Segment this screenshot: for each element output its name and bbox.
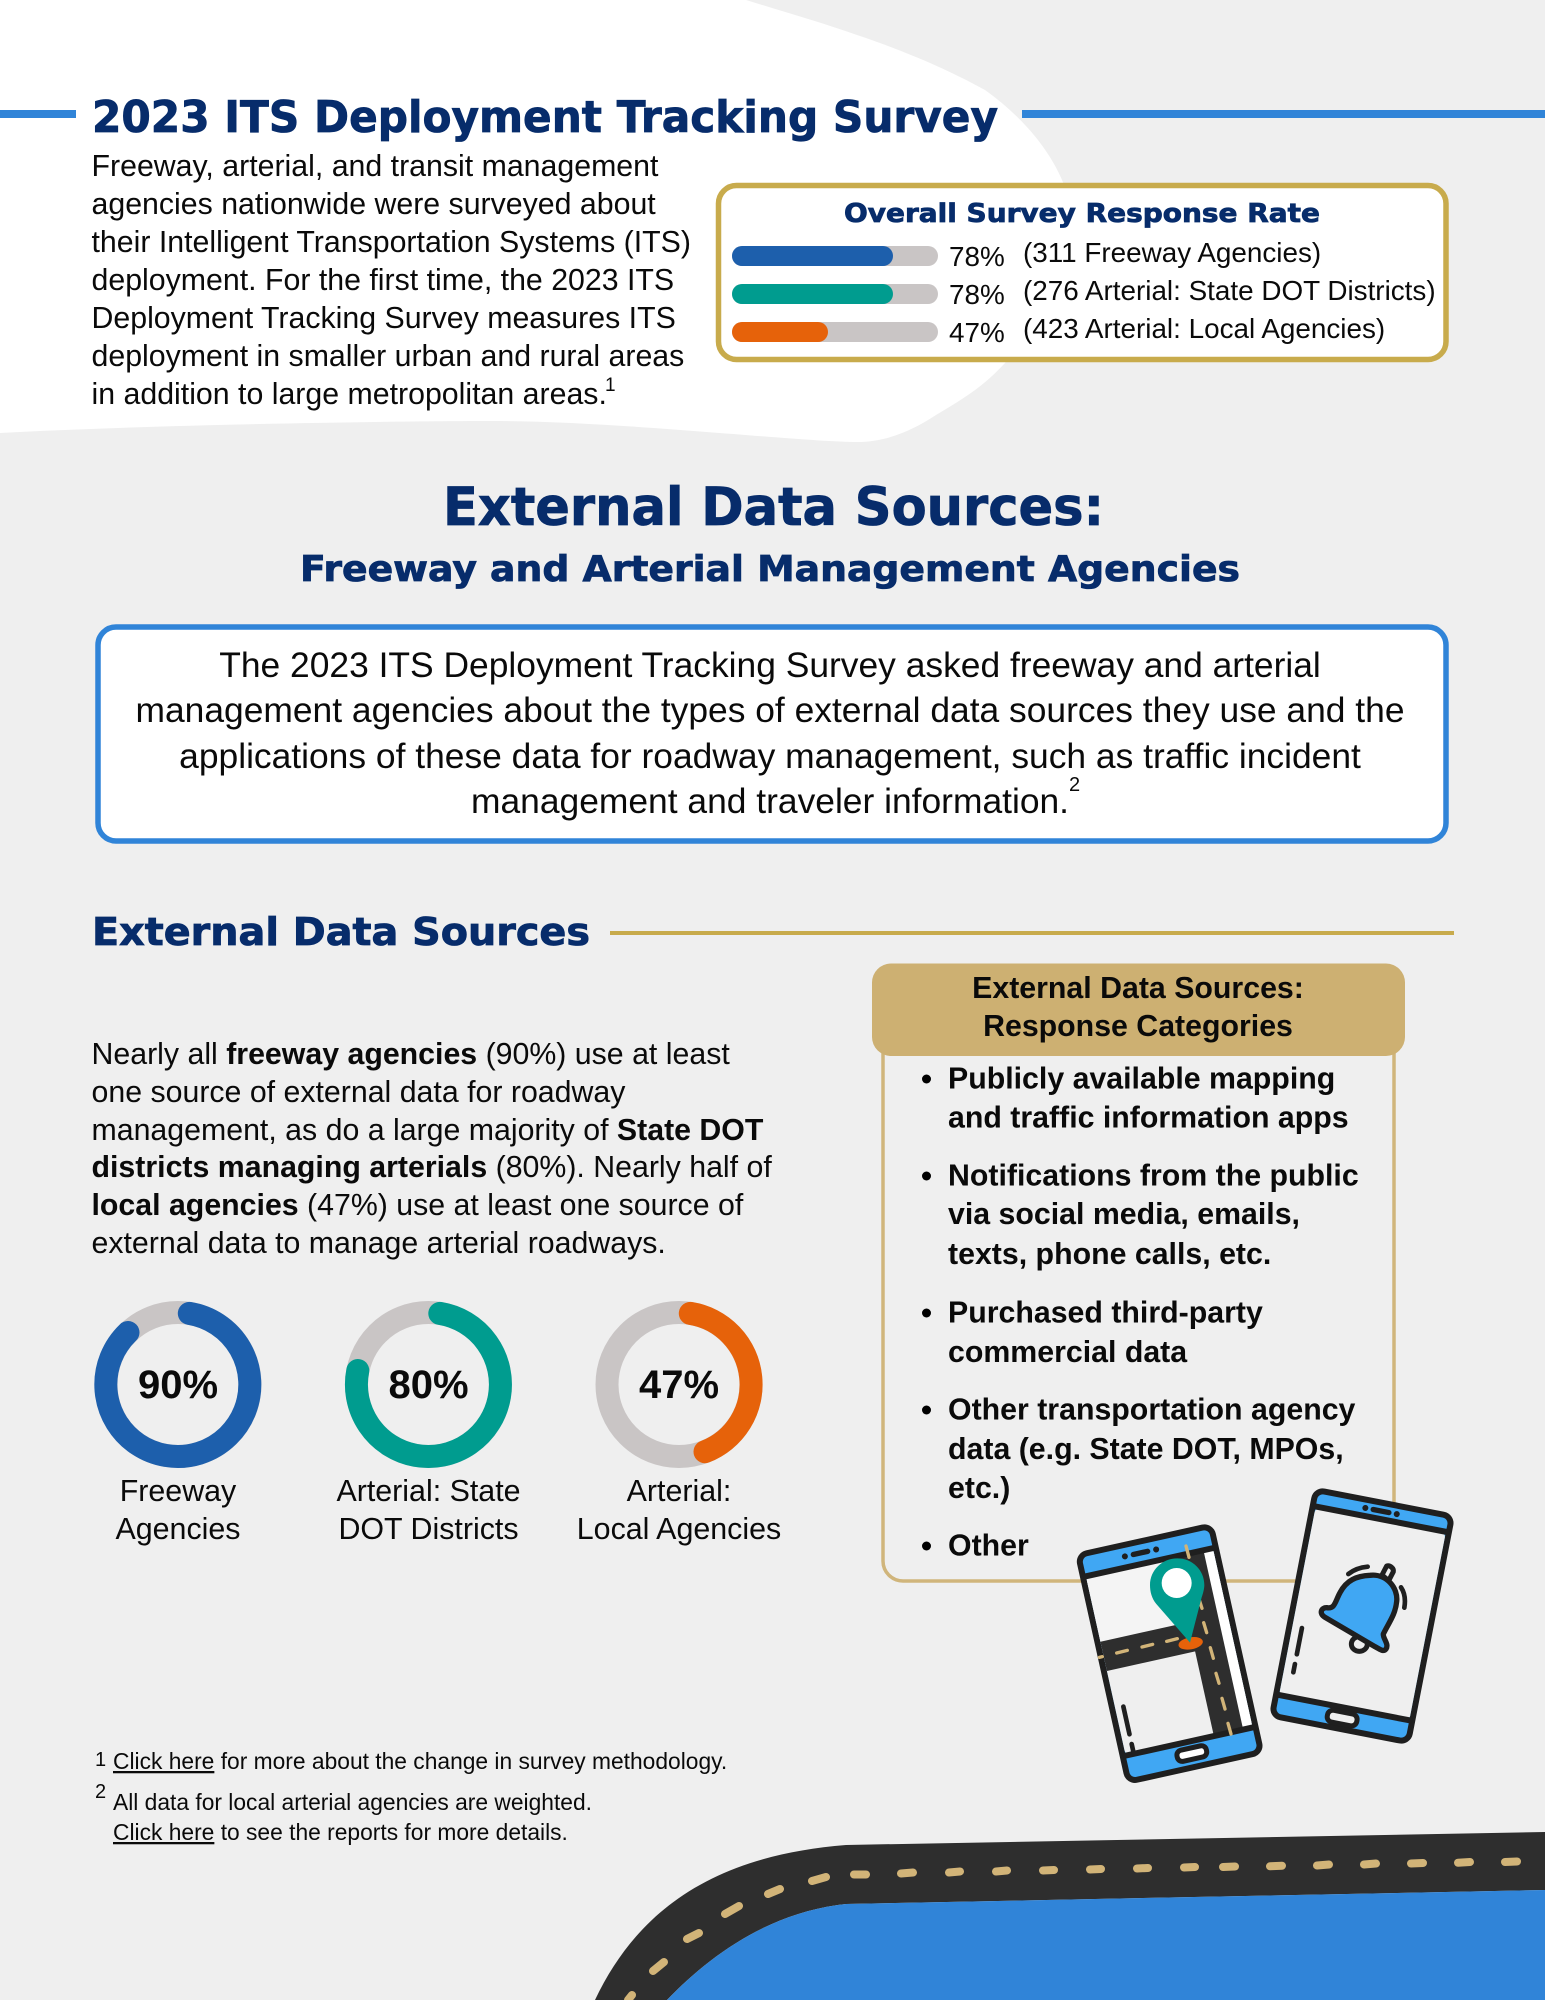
category list: and traffic information apps xyxy=(948,1102,1349,1134)
donut: local agencies 47% xyxy=(577,1312,781,1546)
icon: phone with map xyxy=(1078,1526,1261,1782)
intro text block: their Intelligent Transportation Systems (ITS) xyxy=(92,226,691,259)
freeway response bar: (311 Freeway Agencies) xyxy=(1023,237,1321,268)
donut: freeway agencies 90%: Freeway xyxy=(120,1474,237,1508)
white header blob xyxy=(0,0,1066,442)
state DOT response bar: (276 Arterial: State DOT Districts) xyxy=(1023,275,1436,306)
panel: survey description callout: applications of these data for roadway management, such as traffic incident xyxy=(179,736,1361,776)
panel: overall survey response rate xyxy=(718,186,1446,360)
footnotes: Click here to see the reports for more details. xyxy=(113,1819,568,1845)
donut: freeway agencies 90% xyxy=(106,1312,250,1546)
freeway response bar xyxy=(732,237,1321,272)
freeway response bar: 78% xyxy=(949,241,1005,272)
intro text block: deployment in smaller urban and rural areas xyxy=(92,340,684,373)
category list: Other transportation agency xyxy=(948,1394,1356,1426)
intro text block: 1 xyxy=(605,375,616,396)
local agencies response bar: 47% xyxy=(949,317,1005,348)
panel: survey description callout: management agencies about the types of external data sources they use and the xyxy=(136,690,1404,730)
section rule xyxy=(610,931,1454,935)
category list: commercial data xyxy=(948,1336,1188,1369)
intro text block: Deployment Tracking Survey measures ITS xyxy=(92,302,676,335)
findings paragraph: districts managing arterials (80%). Nearly half of xyxy=(92,1151,772,1184)
intro text block: deployment. For the first time, the 2023 ITS xyxy=(92,264,674,297)
donut: freeway agencies 90%: Agencies xyxy=(115,1512,241,1546)
local agencies response bar xyxy=(732,313,1385,348)
panel header: External Data Sources: xyxy=(972,972,1304,1005)
panel: survey description callout: management and traveler information. xyxy=(471,781,1069,821)
findings paragraph: Nearly all freeway agencies (90%) use at least xyxy=(92,1038,730,1071)
header rule: right xyxy=(1022,110,1545,118)
local agencies response bar: (423 Arterial: Local Agencies) xyxy=(1023,313,1385,344)
panel: survey description callout: 2 xyxy=(1069,774,1080,796)
state DOT response bar: 78% xyxy=(949,279,1005,310)
panel: response categories xyxy=(872,964,1405,1581)
icon: phone with bell xyxy=(1272,1490,1452,1742)
donut: local agencies 47%: Arterial: xyxy=(627,1474,731,1508)
findings paragraph: external data to manage arterial roadways. xyxy=(92,1227,666,1260)
footnotes: 1 xyxy=(95,1749,106,1771)
category list: etc.) xyxy=(948,1472,1010,1505)
panel: survey description callout xyxy=(98,627,1446,841)
donut: local agencies 47%: Local Agencies xyxy=(577,1512,781,1546)
findings paragraph: local agencies (47%) use at least one source of xyxy=(92,1189,744,1222)
panel header: Response Categories xyxy=(983,1010,1293,1043)
category list: Publicly available mapping xyxy=(948,1062,1335,1096)
intro text block: in addition to large metropolitan areas. xyxy=(92,378,607,411)
footnotes: Click here for more about the change in survey methodology. xyxy=(113,1748,727,1774)
findings paragraph: one source of external data for roadway xyxy=(92,1076,626,1109)
footnotes xyxy=(95,1748,727,1845)
state DOT response bar xyxy=(732,275,1436,310)
footnotes: 2 xyxy=(95,1781,106,1803)
intro text block: Freeway, arterial, and transit management xyxy=(92,150,659,183)
category list: texts, phone calls, etc. xyxy=(948,1238,1271,1271)
donut: state DOT districts 80% xyxy=(336,1312,521,1546)
donut: state DOT districts 80%: DOT Districts xyxy=(338,1512,519,1546)
road with blue field xyxy=(595,1832,1545,2000)
findings paragraph xyxy=(92,1038,772,1260)
donut: freeway agencies 90%: 90% xyxy=(138,1363,218,1407)
panel heading: Overall Survey Response Rate xyxy=(844,199,1320,229)
sub heading: Freeway and Arterial Management Agencies xyxy=(300,549,1240,590)
panel: survey description callout: The 2023 ITS Deployment Tracking Survey asked freeway and arterial xyxy=(219,645,1321,685)
footnotes: All data for local arterial agencies are weighted. xyxy=(113,1789,592,1815)
category list: Purchased third-party xyxy=(948,1296,1263,1330)
category list: Notifications from the public xyxy=(948,1160,1359,1192)
main heading: External Data Sources: xyxy=(443,477,1104,538)
category list: via social media, emails, xyxy=(948,1198,1300,1231)
header rule: left xyxy=(0,110,76,118)
intro text block: agencies nationwide were surveyed about xyxy=(92,188,656,221)
donut: state DOT districts 80%: 80% xyxy=(388,1363,469,1407)
section heading: External Data Sources xyxy=(92,910,590,954)
category list xyxy=(922,1062,1359,1562)
donut: local agencies 47%: 47% xyxy=(639,1363,719,1407)
findings paragraph: management, as do a large majority of State DOT xyxy=(92,1114,764,1147)
category list: Other xyxy=(948,1530,1029,1562)
title: 2023 ITS Deployment Tracking Survey xyxy=(92,92,998,143)
panel header xyxy=(872,964,1405,1056)
category list: data (e.g. State DOT, MPOs, xyxy=(948,1433,1344,1466)
donut: state DOT districts 80%: Arterial: State xyxy=(336,1474,521,1508)
intro text block xyxy=(92,150,691,411)
